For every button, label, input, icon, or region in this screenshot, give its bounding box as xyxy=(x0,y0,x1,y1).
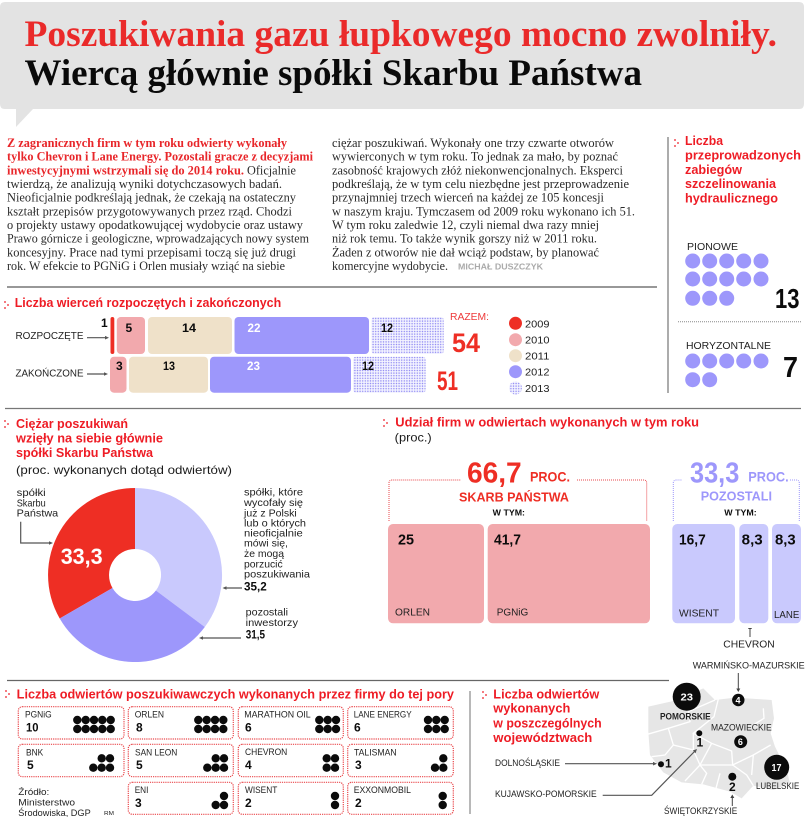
article text: right column: wywierconych w tym roku. To jednak za mało, by poznać xyxy=(332,149,618,164)
horizontal count: 7 xyxy=(685,340,798,387)
card: ENI xyxy=(128,782,233,814)
marker: Mazowieckie 6: MAZOWIECKIE xyxy=(711,723,772,734)
panel: donut chart xyxy=(4,417,310,662)
marker: Dolnośląskie 1: DOLNOŚLĄSKIE xyxy=(495,757,560,769)
label: withdrawn companies xyxy=(222,487,310,593)
panel: hydraulic fracturing xyxy=(674,134,801,387)
panel heading: Udział firm w odwiertach wykonanych w tym roku xyxy=(395,416,699,430)
marker: Warmińsko-Mazurskie 4: 4 xyxy=(736,695,741,705)
others group: 16,7 xyxy=(679,531,706,548)
article text: left column: koncesyjny. Prace nad tymi przepisami toczą się już drugi xyxy=(7,244,296,259)
panel: wells started and finished xyxy=(4,296,550,396)
label: withdrawn companies: że mogą xyxy=(244,548,284,560)
article text: left column: rok. W efekcie to PGNiG i Orlen musiały wziąć na siebie xyxy=(7,258,285,273)
label: state companies xyxy=(17,487,58,545)
card: ORLEN: 8 xyxy=(136,721,143,735)
header banner xyxy=(0,2,804,127)
panel heading: w poszczególnych xyxy=(492,716,602,730)
article text: left column: inwestycyjnymi wstrzymali się do 2014 roku. xyxy=(7,162,244,177)
panel heading: Liczba wierceń rozpoczętych i zakończonych xyxy=(15,296,281,310)
card: BNK xyxy=(18,744,124,777)
panel heading: Ciężar poszukiwań xyxy=(16,417,128,431)
label: other investors: pozostali xyxy=(246,607,288,619)
article text: left column: Z zagranicznych firm w tym roku odwierty wykonały xyxy=(7,135,287,150)
panel heading: wykonanych xyxy=(492,702,570,716)
marker: Lubelskie 17: 17 xyxy=(772,763,782,774)
card: BNK: 5 xyxy=(27,758,34,772)
marker: Lubelskie 17 xyxy=(756,755,799,792)
marker: Kujawsko-Pomorskie 1: 1 xyxy=(696,736,704,750)
marker: Pomorskie 23: 23 xyxy=(680,692,693,704)
others group: LANE xyxy=(774,609,799,621)
source note xyxy=(18,787,114,817)
marker: Warmińsko-Mazurskie 4 xyxy=(693,660,805,706)
card: MARATHON OIL: MARATHON OIL xyxy=(244,710,311,721)
card: WISENT: 2 xyxy=(245,796,252,810)
others group: 8,3 xyxy=(742,531,763,548)
others group: WISENT xyxy=(679,608,720,620)
article text: right column: komercyjne wydobycie. xyxy=(332,258,448,273)
legend: 2010 xyxy=(525,335,550,347)
marker: Mazowieckie 6: 6 xyxy=(738,737,743,747)
article text: right column: MICHAŁ DUSZCZYK xyxy=(458,262,544,272)
others group xyxy=(672,457,801,651)
article text: right column: w naszym kraju. Tymczasem od 2009 roku wykonano ich 51. xyxy=(332,203,635,218)
state treasury group: PGNiG xyxy=(497,607,528,619)
card: TALISMAN: TALISMAN xyxy=(354,748,397,759)
panel heading: zabiegów xyxy=(685,163,742,177)
panel heading: (proc.) xyxy=(395,431,432,445)
card: PGNiG xyxy=(18,707,124,739)
panel heading xyxy=(383,416,699,445)
row: finished: 12 xyxy=(362,359,374,373)
marker: Dolnośląskie 1 xyxy=(495,756,672,770)
panel: company share xyxy=(383,416,801,651)
source note: Ministerstwo xyxy=(18,797,75,808)
card: ORLEN: ORLEN xyxy=(135,710,164,721)
row: started xyxy=(16,316,444,354)
others group: CHEVRON xyxy=(723,639,775,651)
card: ENI: 3 xyxy=(135,796,142,810)
row: started: 14 xyxy=(182,321,196,335)
panel heading xyxy=(482,687,602,745)
state treasury group: PROC. xyxy=(530,469,570,485)
card: MARATHON OIL: 6 xyxy=(245,721,252,735)
others group: 33,3 xyxy=(690,457,739,489)
totals xyxy=(437,311,489,396)
panel heading: wzięły na siebie głównie xyxy=(15,432,163,446)
card: PGNiG: PGNiG xyxy=(25,710,52,721)
panel heading: szczelinowania xyxy=(685,177,777,191)
article text: left column: Nieoficjalnie podkreślają jednak, że czekają na ostateczny xyxy=(7,190,296,205)
legend xyxy=(509,317,550,395)
marker: Kujawsko-Pomorskie 1 xyxy=(495,730,704,800)
card: TALISMAN xyxy=(348,744,453,777)
panel heading: (proc. wykonanych dotąd odwiertów) xyxy=(16,463,232,477)
card: MARATHON OIL xyxy=(238,707,343,739)
label: withdrawn companies: spółki, które xyxy=(244,487,303,499)
row: started: 12 xyxy=(381,321,393,335)
panel heading: hydraulicznego xyxy=(685,192,778,206)
label: withdrawn companies: wycofały się xyxy=(243,497,303,509)
article text: right column: podkreślają, że w tym celu niezbędne jest przeprowadzenie xyxy=(332,176,629,191)
marker: Pomorskie 23: POMORSKIE xyxy=(660,711,711,722)
totals: 54 xyxy=(452,328,480,358)
label: state companies: Państwa xyxy=(17,508,58,520)
article text: right column: ciężar poszukiwań. Wykonały one trzy czwarte otworów xyxy=(332,135,615,150)
label: other investors: 31,5 xyxy=(246,627,265,641)
panel: wells by company xyxy=(5,687,454,817)
panel heading: przeprowadzonych xyxy=(685,148,801,162)
row: started: 22 xyxy=(248,321,261,335)
panel heading: województwach xyxy=(492,731,592,745)
article text: right column: przynajmniej trzech wierceń na każdej ze 105 koncesji xyxy=(332,190,604,205)
state treasury group xyxy=(388,457,650,623)
label: state companies: spółki xyxy=(17,487,46,499)
card: SAN LEON xyxy=(128,744,233,777)
card: TALISMAN: 3 xyxy=(355,758,362,772)
panel: wells by voivodeship xyxy=(482,660,805,817)
card: LANE ENERGY: 6 xyxy=(354,721,361,735)
article text: left column: tylko Chevron i Lane Energy. Pozostali gracze z decyzjami xyxy=(7,149,313,164)
state treasury group: ORLEN xyxy=(395,607,430,619)
article text: left column: kształt przepisów przygotowywanych przez rząd. Chodzi xyxy=(7,203,292,218)
row: finished: ZAKOŃCZONE xyxy=(16,367,84,380)
legend: 2011 xyxy=(525,351,550,363)
label: withdrawn companies: już z Polski xyxy=(243,507,297,519)
vertical count: 13 xyxy=(685,241,800,314)
card: LANE ENERGY: LANE ENERGY xyxy=(354,710,412,721)
panel heading: Liczba xyxy=(685,134,724,148)
label: other investors xyxy=(199,607,299,641)
card: CHEVRON: CHEVRON xyxy=(245,747,287,758)
panel heading: Liczba odwiertów xyxy=(493,687,600,701)
panel heading: Liczba odwiertów poszukiwawczych wykonanych przez firmy do tej pory xyxy=(17,687,454,701)
label: withdrawn companies: porzucić xyxy=(244,558,283,570)
marker: Świętokrzyskie 2: 2 xyxy=(729,780,736,794)
row: finished: 23 xyxy=(247,359,260,373)
panel heading xyxy=(674,134,801,206)
marker: Świętokrzyskie 2 xyxy=(664,773,737,817)
article text: left column: Prawo górnicze i geologiczne, wprowadzających nowy system xyxy=(7,231,309,246)
marker: Mazowieckie 6 xyxy=(711,723,772,748)
legend: 2013 xyxy=(525,383,550,395)
card: ORLEN xyxy=(128,707,233,739)
row: started: ROZPOCZĘTE xyxy=(16,330,84,342)
label: other investors: inwestorzy xyxy=(246,617,299,629)
article text: left column: twierdzą, że analizują wyniki dotychczasowych badań. xyxy=(7,176,282,191)
card: BNK: BNK xyxy=(26,748,44,759)
marker: Kujawsko-Pomorskie 1: KUJAWSKO-POMORSKIE xyxy=(495,789,597,800)
card: LANE ENERGY xyxy=(348,707,453,739)
card: EXXONMOBIL: EXXONMOBIL xyxy=(354,785,411,796)
row: started: 1 xyxy=(101,316,108,330)
article text: right column xyxy=(332,135,635,273)
title: Poszukiwania gazu łupkowego mocno zwolniły. xyxy=(24,14,777,55)
horizontal count: 7: 7 xyxy=(783,352,798,384)
map of Poland xyxy=(647,688,790,798)
legend: 2012 xyxy=(525,367,550,379)
article text: right column: W tym roku zaledwie 12, czyli niemal dwa razy mniej xyxy=(332,217,599,232)
card: CHEVRON xyxy=(238,744,343,777)
label: withdrawn companies: poszukiwania xyxy=(244,568,310,580)
label: withdrawn companies: mówi się, xyxy=(244,538,288,550)
state treasury group: SKARB PAŃSTWA xyxy=(459,490,570,505)
others group: 8,3 xyxy=(775,531,796,548)
card: WISENT xyxy=(238,782,343,814)
totals: RAZEM: xyxy=(450,311,489,323)
marker: Świętokrzyskie 2: ŚWIĘTOKRZYSKIE xyxy=(664,805,737,817)
label: withdrawn companies: lub o których xyxy=(244,518,306,530)
article text: right column: Żaden z otworów nie dał wciąż podstaw, by planować xyxy=(332,244,599,259)
state treasury group: 25 xyxy=(398,531,414,548)
row: started: 5 xyxy=(126,321,132,335)
label: withdrawn companies: nieoficjalnie xyxy=(244,528,303,540)
article text: right column: zasobność krajowych złóż niekonwencjonalnych. Eksperci xyxy=(332,162,623,177)
donut xyxy=(48,488,222,662)
marker: Dolnośląskie 1: 1 xyxy=(665,756,672,770)
card: CHEVRON: 4 xyxy=(245,758,252,772)
others group: W TYM: xyxy=(724,508,757,518)
card: EXXONMOBIL: 2 xyxy=(355,796,362,810)
source note: RM xyxy=(104,811,114,817)
panel heading: spółki Skarbu Państwa xyxy=(16,446,154,460)
card: EXXONMOBIL xyxy=(348,782,453,814)
state treasury group: 41,7 xyxy=(494,531,521,548)
article text: left column: Oficjalnie xyxy=(247,162,296,177)
article text: left column: o projekty ustawy opodatkowującej wydobycie oraz ustawy xyxy=(7,217,303,232)
article text: right column: niż rok temu. To także wynik gorszy niż w 2011 roku. xyxy=(332,231,597,246)
others group: PROC. xyxy=(748,469,789,485)
article text: left column xyxy=(7,135,313,273)
card: WISENT: WISENT xyxy=(245,785,277,796)
card: PGNiG: 10 xyxy=(26,721,39,735)
source note: Źródło: xyxy=(18,787,49,798)
label: withdrawn companies: 35,2 xyxy=(244,579,267,593)
state treasury group: W TYM: xyxy=(493,508,525,518)
horizontal count: 7: HORYZONTALNE xyxy=(686,340,771,352)
legend: 2009 xyxy=(525,318,550,330)
panel heading xyxy=(4,417,232,477)
marker: Pomorskie 23 xyxy=(660,683,711,722)
donut: 33,3 xyxy=(61,544,103,569)
card: SAN LEON: SAN LEON xyxy=(135,748,177,759)
vertical count: 13: PIONOWE xyxy=(687,241,738,253)
state treasury group: 66,7 xyxy=(467,457,522,489)
row: finished: 3 xyxy=(116,359,123,373)
card: ENI: ENI xyxy=(135,785,148,796)
card: SAN LEON: 5 xyxy=(136,758,143,772)
row: finished: 13 xyxy=(163,359,175,373)
totals: 51 xyxy=(437,366,458,396)
others group: POZOSTALI xyxy=(701,489,772,504)
row: finished xyxy=(16,357,426,393)
subtitle: Wiercą głównie spółki Skarbu Państwa xyxy=(24,53,642,94)
label: state companies: Skarbu xyxy=(17,497,46,509)
